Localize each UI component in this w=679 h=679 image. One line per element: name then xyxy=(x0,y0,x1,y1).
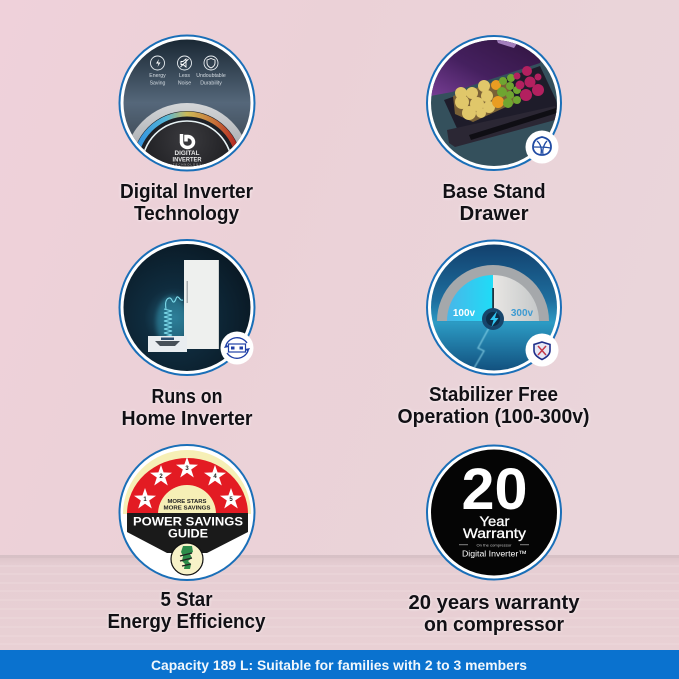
heading: 20 years warranty on compressor xyxy=(408,592,580,636)
heading: runs on home inverter: Home Inverter xyxy=(122,408,253,430)
icon: five stars: 3 xyxy=(185,466,189,472)
icon: digital inverter gauge circle: DIGITAL xyxy=(174,150,200,157)
icon: energy saving: Energy xyxy=(149,73,166,79)
icon: undoubtable durability xyxy=(196,56,226,86)
heading: digital inverter technology xyxy=(120,181,253,225)
heading: 20 years warranty on compressor: 20 years warranty xyxy=(408,592,580,614)
icon: five stars xyxy=(134,457,242,508)
icon: warranty badge: Warranty xyxy=(463,525,526,541)
panel: base stand drawer xyxy=(424,28,561,225)
icon: power savings guide label: POWER SAVINGS xyxy=(133,514,243,528)
heading: 5 star energy efficiency: 5 Star xyxy=(160,589,213,611)
heading: 20 years warranty on compressor: on compressor xyxy=(424,614,564,636)
icon: power savings guide label: GUIDE xyxy=(168,526,208,540)
panel: stabilizer free operation xyxy=(398,240,590,428)
heading: digital inverter technology: Technology xyxy=(134,203,240,225)
panel: 5 star energy efficiency xyxy=(108,445,266,633)
icon: warranty badge xyxy=(427,446,561,580)
heading: base stand drawer: Base Stand xyxy=(442,181,546,203)
panel: 20 years warranty xyxy=(408,446,580,636)
capacity banner: Capacity 189 L: Suitable for families with 2 to 3 members xyxy=(151,657,527,673)
icon: less noise xyxy=(178,56,192,86)
wooden floor xyxy=(0,555,679,650)
icon: badge shield xyxy=(526,334,558,366)
heading: runs on home inverter xyxy=(122,386,253,430)
icon: undoubtable durability: Undoubtable xyxy=(196,73,226,79)
heading: 5 star energy efficiency xyxy=(108,589,266,633)
icon: badge inverter xyxy=(220,332,254,364)
panel: digital inverter technology xyxy=(119,35,255,229)
icon: five stars: 2 xyxy=(159,474,163,480)
icon: fridge and inverter xyxy=(120,240,254,375)
panel: runs on home inverter xyxy=(120,240,254,430)
icon: five stars: 1 xyxy=(143,497,147,503)
icon: warranty badge: 20 xyxy=(462,457,528,522)
heading: runs on home inverter: Runs on xyxy=(152,386,222,408)
heading: 5 star energy efficiency: Energy Efficiency xyxy=(108,611,266,633)
icon: medallion xyxy=(171,543,203,575)
heading: digital inverter technology: Digital Inverter xyxy=(120,181,253,203)
icon: power savings guide label: MORE SAVINGS xyxy=(164,506,211,512)
icon: power savings guide label: MORE STARS xyxy=(168,499,207,505)
heading: base stand drawer xyxy=(442,181,546,225)
icon: energy saving xyxy=(149,56,166,86)
icon: less noise: Less xyxy=(179,73,190,79)
icon: warranty badge: Year xyxy=(480,513,510,529)
icon: voltage gauge xyxy=(427,240,561,375)
icon: drawer with produce xyxy=(424,28,561,170)
icon: less noise: Noise xyxy=(178,80,191,86)
heading: stabilizer free operation xyxy=(398,384,590,428)
capacity banner xyxy=(0,650,679,679)
icon: five stars: 5 xyxy=(229,497,233,503)
icon: digital inverter gauge circle xyxy=(118,34,256,172)
icon: digital inverter gauge circle: INVERTER xyxy=(172,156,202,164)
icon: badge produce xyxy=(526,130,558,164)
icon: voltage gauge: 100v xyxy=(453,308,476,319)
icon: digital inverter gauge circle: TECHNOLOGY xyxy=(173,162,201,166)
icon: five stars: 4 xyxy=(213,474,217,480)
icon: warranty badge: Digital Inverter™ xyxy=(462,548,527,558)
icon: energy saving: Saving xyxy=(150,80,166,86)
heading: stabilizer free operation: Stabilizer Free xyxy=(429,384,558,406)
icon: voltage gauge: 300v xyxy=(511,308,534,319)
heading: base stand drawer: Drawer xyxy=(460,203,529,225)
icon: undoubtable durability: Durability xyxy=(200,80,222,86)
heading: stabilizer free operation: Operation (100-300v) xyxy=(398,406,590,428)
icon: warranty badge: On the compressor xyxy=(476,542,512,548)
icon: power savings guide label xyxy=(120,445,254,580)
